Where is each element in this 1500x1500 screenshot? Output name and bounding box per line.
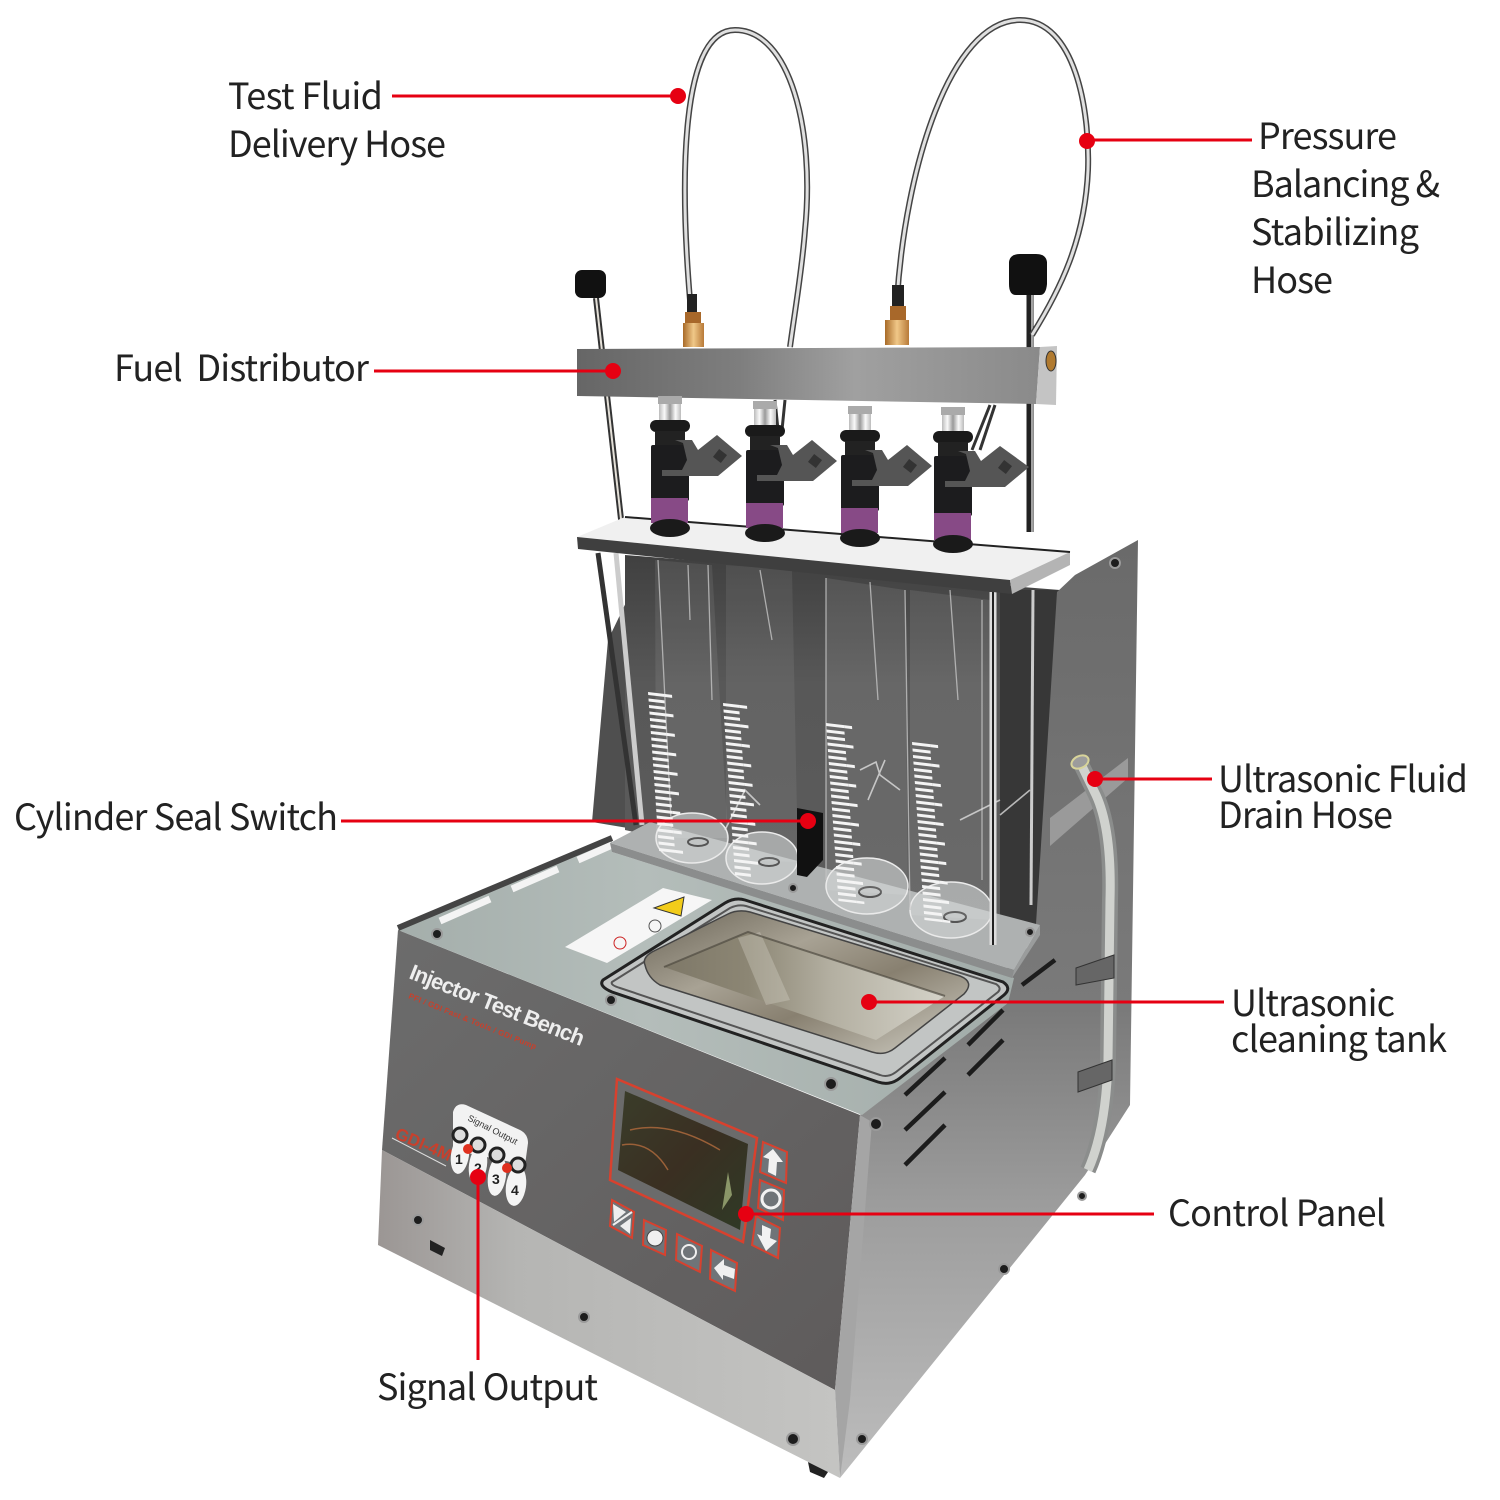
cylinder scale 2 xyxy=(731,704,755,877)
up button xyxy=(760,1142,787,1183)
callout: cylinder seal switch xyxy=(14,789,816,841)
brass fitting left xyxy=(683,294,704,347)
injector 1 xyxy=(650,396,742,537)
signal output plate: 2 xyxy=(474,1160,482,1176)
cylinder scale 1 xyxy=(656,693,679,856)
callout: fuel distributor: Fuel Distributor xyxy=(114,340,370,392)
cylinder scale 4 xyxy=(921,743,946,923)
cylinder base plate xyxy=(610,813,1040,978)
settings button xyxy=(643,1220,666,1255)
machine illustration xyxy=(378,20,1138,1478)
signal output plate: 3 xyxy=(492,1171,500,1187)
callout: pressure balancing hose: Stabilizing xyxy=(1251,204,1419,256)
product title: Injector Test Bench xyxy=(406,959,588,1051)
display screen xyxy=(618,1091,748,1230)
light button xyxy=(676,1234,702,1272)
side vents xyxy=(905,960,1055,1165)
signal output plate xyxy=(448,1104,529,1207)
brass fitting right xyxy=(885,285,909,345)
callout: ultrasonic fluid drain hose: Ultrasonic Fluid xyxy=(1218,751,1468,803)
fuel distributor rail xyxy=(577,346,1057,405)
injector 2 xyxy=(745,401,837,542)
cylinder scale 3 xyxy=(835,724,860,904)
signal output plate: 1 xyxy=(455,1151,463,1167)
callout: fuel distributor xyxy=(114,340,621,392)
cylinder seal switch xyxy=(797,808,823,877)
control panel xyxy=(610,1079,787,1291)
callout: pressure balancing hose: Pressure xyxy=(1258,108,1397,160)
callout: test fluid delivery hose: Delivery Hose xyxy=(228,116,446,168)
back wall and tower xyxy=(592,540,1138,1478)
pressure balancing hose xyxy=(897,20,1088,335)
callout: pressure balancing hose: Balancing & xyxy=(1251,156,1440,208)
drain hose xyxy=(1069,753,1110,1170)
display frame xyxy=(610,1079,757,1242)
back wires behind injectors xyxy=(775,400,995,450)
callout: signal output xyxy=(377,1169,598,1411)
injector 3 xyxy=(840,406,932,547)
product title: PFI / GDI Fast & Tools / GDI Pump xyxy=(407,992,538,1051)
lower front silver panel xyxy=(378,1150,840,1478)
callout: control panel: Control Panel xyxy=(1168,1185,1386,1237)
left knob xyxy=(575,270,606,298)
injector mounting plate xyxy=(577,517,1070,594)
callout: ultrasonic fluid drain hose: Drain Hose xyxy=(1218,787,1393,839)
back button xyxy=(710,1250,737,1291)
down button xyxy=(752,1216,780,1258)
body screws xyxy=(413,1118,1086,1445)
test cylinders xyxy=(655,560,1030,923)
callout: ultrasonic fluid drain hose xyxy=(1087,751,1468,839)
callout: ultrasonic cleaning tank: cleaning tank xyxy=(1231,1011,1447,1063)
test fluid delivery hose xyxy=(685,30,807,347)
callout: control panel xyxy=(738,1185,1386,1237)
injector 4 xyxy=(933,407,1029,553)
right knob xyxy=(1009,254,1047,295)
ok button xyxy=(758,1180,784,1220)
warning sticker xyxy=(565,888,712,963)
callout: pressure balancing hose xyxy=(1079,108,1440,304)
signal output plate: Signal Output xyxy=(466,1113,520,1147)
mode button xyxy=(610,1200,634,1238)
ultrasonic cleaning tank xyxy=(602,899,1008,1083)
callout: test fluid delivery hose xyxy=(228,68,686,168)
callout: pressure balancing hose: Hose xyxy=(1251,252,1333,304)
callout: signal output: Signal Output xyxy=(377,1359,598,1411)
callout: cylinder seal switch: Cylinder Seal Switch xyxy=(14,789,338,841)
base deck xyxy=(398,838,1014,1115)
front panel xyxy=(382,930,860,1390)
feet xyxy=(430,1240,828,1478)
right lower corner edge xyxy=(835,1115,872,1478)
signal output plate: 4 xyxy=(511,1182,519,1198)
hose clamps xyxy=(1076,955,1114,1092)
guide rods xyxy=(596,295,1033,945)
callout: ultrasonic cleaning tank: Ultrasonic xyxy=(1231,975,1395,1027)
model badge: GDI-4M xyxy=(392,1124,455,1165)
callout: test fluid delivery hose: Test Fluid xyxy=(228,68,383,120)
callout: ultrasonic cleaning tank xyxy=(861,975,1447,1063)
